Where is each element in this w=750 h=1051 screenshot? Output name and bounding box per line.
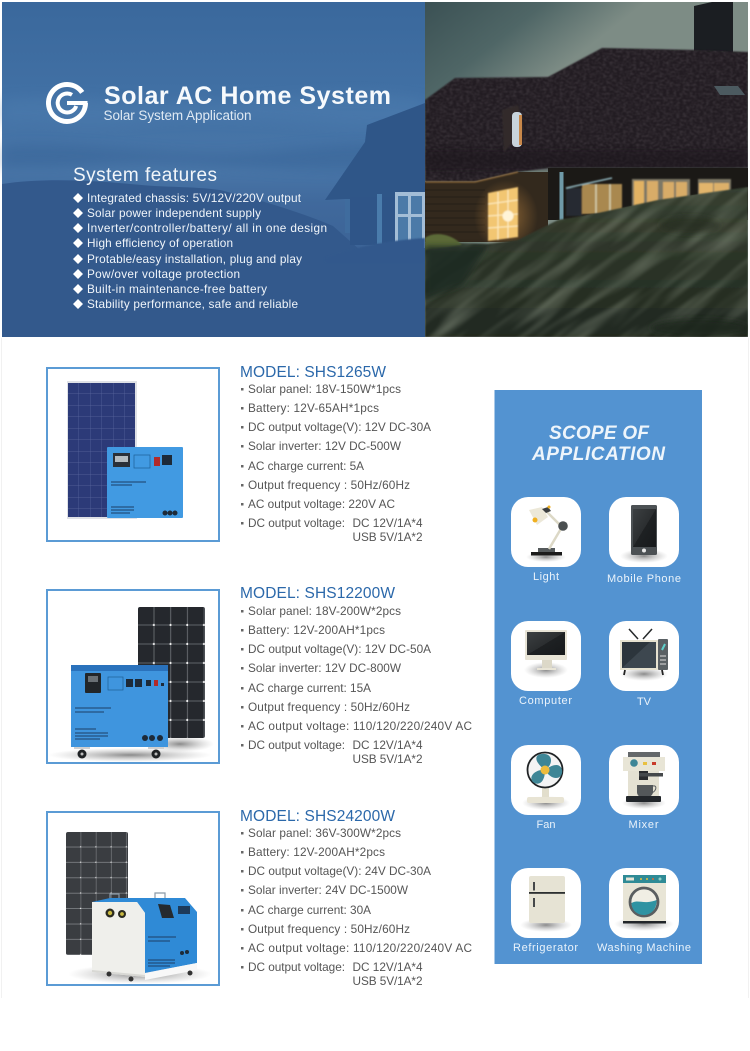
list: system features: Integrated chassis: 5V/12V/220V output [87,191,302,205]
windswept grass hill [425,186,748,337]
panel: product image SHS12200W [47,590,219,763]
specs SHS1265W: Solar panel: 18V-150W*1pcs [248,382,401,396]
model heading SHS1265W: MODEL: SHS1265W [240,364,386,381]
large lit window [488,187,518,241]
icon: mixer [609,745,679,815]
label: computer: Computer [519,695,572,707]
label: fan: Fan [536,819,556,831]
heading: scope of application: SCOPE OF [549,423,650,444]
specs SHS1265W: AC charge current: 5A [248,459,364,473]
list: system features: High efficiency of operation [87,236,233,250]
specs SHS12200W: Solar inverter: 12V DC-800W [248,661,402,675]
window glow [476,183,535,242]
specs SHS24200W: AC charge current: 30A [248,903,371,917]
heading: system features: System features [73,165,217,186]
specs SHS12200W: Output frequency : 50Hz/60Hz [248,700,410,714]
title: Solar AC Home System [104,82,391,110]
specs SHS24200W: Battery: 12V-200AH*2pcs [248,845,385,859]
label: tv: TV [637,696,652,708]
specs SHS12200W [241,604,472,766]
panel: hero banner [0,2,748,337]
icon: computer [511,621,581,691]
specs SHS24200W: USB 5V/1A*2 [352,974,422,988]
floor shadow [48,736,214,762]
label: washing machine: Washing Machine [597,942,691,954]
generator box [71,665,168,747]
specs SHS12200W: AC output voltage: 110/120/220/240V AC [248,719,472,733]
hero left: blue tinted photo [2,2,425,337]
list: system features [73,191,327,311]
specs SHS1265W: DC output voltage: [248,516,345,530]
specs SHS12200W: Solar panel: 18V-200W*2pcs [248,604,401,618]
subtitle: Solar System Application [104,108,252,123]
specs SHS24200W: DC output voltage: [248,960,345,974]
specs SHS1265W: Battery: 12V-65AH*1pcs [248,401,379,415]
hero right: dusk photo of thatched house [425,2,748,337]
label: mobile phone: Mobile Phone [607,573,681,585]
list: system features: Built-in maintenance-free battery [87,282,267,296]
icon: washing machine [609,868,679,938]
glass door [566,178,622,216]
specs SHS24200W: AC output voltage: 110/120/220/240V AC [248,941,472,955]
generator cabinet [92,893,197,982]
generator box [107,447,183,518]
solar panel [138,607,205,738]
floor shadow [68,964,212,984]
specs SHS24200W: Solar inverter: 24V DC-1500W [248,883,409,897]
heading: scope of application: APPLICATION [531,444,666,465]
list: system features: Solar power independent supply [87,206,261,220]
heading: scope of application [531,423,666,465]
specs SHS1265W [241,382,431,544]
icon: tv [609,621,679,691]
specs SHS12200W: AC charge current: 15A [248,681,371,695]
label: light: Light [533,571,559,583]
drainpipe [560,172,564,220]
house walls [425,172,548,242]
specs SHS12200W: Battery: 12V-200AH*1pcs [248,623,385,637]
specs SHS1265W: DC output voltage(V): 12V DC-30A [248,420,431,434]
specs SHS24200W [241,826,472,988]
icon: light [511,497,581,567]
chimney [694,2,733,52]
house silhouette [325,103,425,248]
list: system features: Protable/easy installation, plug and play [87,252,302,266]
row of lit windows [632,179,731,207]
panel: product image SHS24200W [47,812,219,985]
specs SHS12200W: DC output voltage: [248,738,345,752]
thatched roof [425,48,748,182]
specs SHS1265W: Output frequency : 50Hz/60Hz [248,478,410,492]
specs SHS24200W: DC 12V/1A*4 [352,960,423,974]
specs SHS12200W: DC 12V/1A*4 [352,738,423,752]
specs SHS1265W: AC output voltage: 220V AC [248,497,395,511]
label: refrigerator: Refrigerator [513,942,578,954]
specs SHS1265W: USB 5V/1A*2 [352,530,422,544]
specs SHS12200W: USB 5V/1A*2 [352,752,422,766]
wheels [74,747,164,758]
icon: company logo [49,84,88,121]
list: system features: Stability performance, safe and reliable [87,297,298,311]
dormer window [502,105,524,152]
specs SHS12200W: DC output voltage(V): 12V DC-50A [248,642,431,656]
panel: product image SHS1265W [47,368,219,541]
panel: scope of application [494,390,702,964]
icon: mobile phone [609,497,679,567]
chimney flashing [714,86,745,95]
list: system features: Inverter/controller/battery/ all in one design [87,221,327,235]
icon: fan [511,745,581,815]
specs SHS24200W: DC output voltage(V): 24V DC-30A [248,864,431,878]
list: system features: Pow/over voltage protection [87,267,240,281]
specs SHS1265W: DC 12V/1A*4 [352,516,423,530]
label: mixer: Mixer [628,819,659,831]
model heading SHS12200W: MODEL: SHS12200W [240,585,395,602]
icon: refrigerator [511,868,581,938]
specs SHS24200W: Output frequency : 50Hz/60Hz [248,922,410,936]
specs SHS1265W: Solar inverter: 12V DC-500W [248,439,402,453]
specs SHS24200W: Solar panel: 36V-300W*2pcs [248,826,401,840]
solar panel [66,832,128,955]
model heading SHS24200W: MODEL: SHS24200W [240,808,395,825]
solar panel [67,381,137,519]
